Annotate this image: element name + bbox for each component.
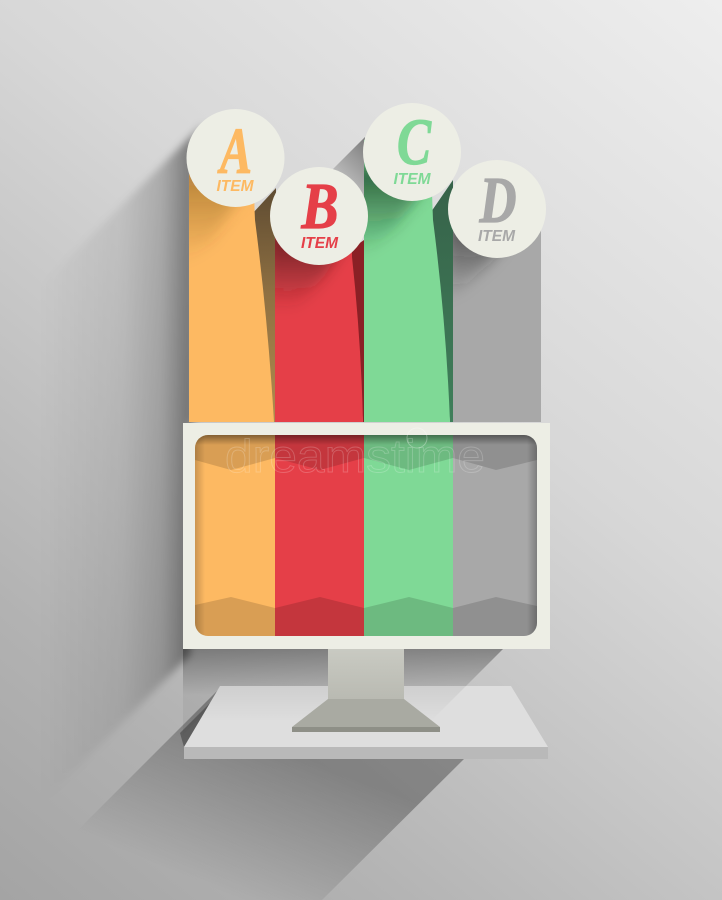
strip A shadow bbox=[252, 188, 276, 422]
long shadows cast on the background bbox=[30, 123, 503, 900]
circle C bbox=[363, 103, 461, 201]
circle A bbox=[186, 109, 284, 207]
watermark: dreamstime bbox=[225, 430, 485, 482]
strip B red bbox=[275, 238, 363, 422]
strip D gray bbox=[453, 230, 541, 422]
panel: circles bbox=[186, 103, 546, 265]
circle D: ITEM bbox=[478, 228, 516, 245]
circle A: ITEM bbox=[216, 178, 255, 195]
circle D bbox=[448, 160, 546, 258]
circle B: B bbox=[301, 170, 338, 243]
circle B: ITEM bbox=[301, 235, 339, 252]
circle D: D bbox=[479, 164, 516, 237]
panel: monitor stand bbox=[292, 649, 440, 732]
panel: monitor screen bbox=[183, 423, 550, 649]
panel: colour strips bbox=[170, 140, 541, 422]
circle C: C bbox=[397, 106, 432, 179]
strip A orange bbox=[189, 174, 274, 422]
circle C: ITEM bbox=[393, 171, 432, 188]
strip C green bbox=[364, 140, 450, 422]
bottom folds bbox=[195, 597, 537, 636]
top folds bbox=[195, 435, 537, 470]
circle A: A bbox=[217, 115, 252, 188]
circle B bbox=[270, 167, 368, 265]
panel: shelf bbox=[184, 686, 548, 759]
strip C shadow bbox=[431, 180, 453, 422]
strip B shadow bbox=[350, 240, 364, 422]
